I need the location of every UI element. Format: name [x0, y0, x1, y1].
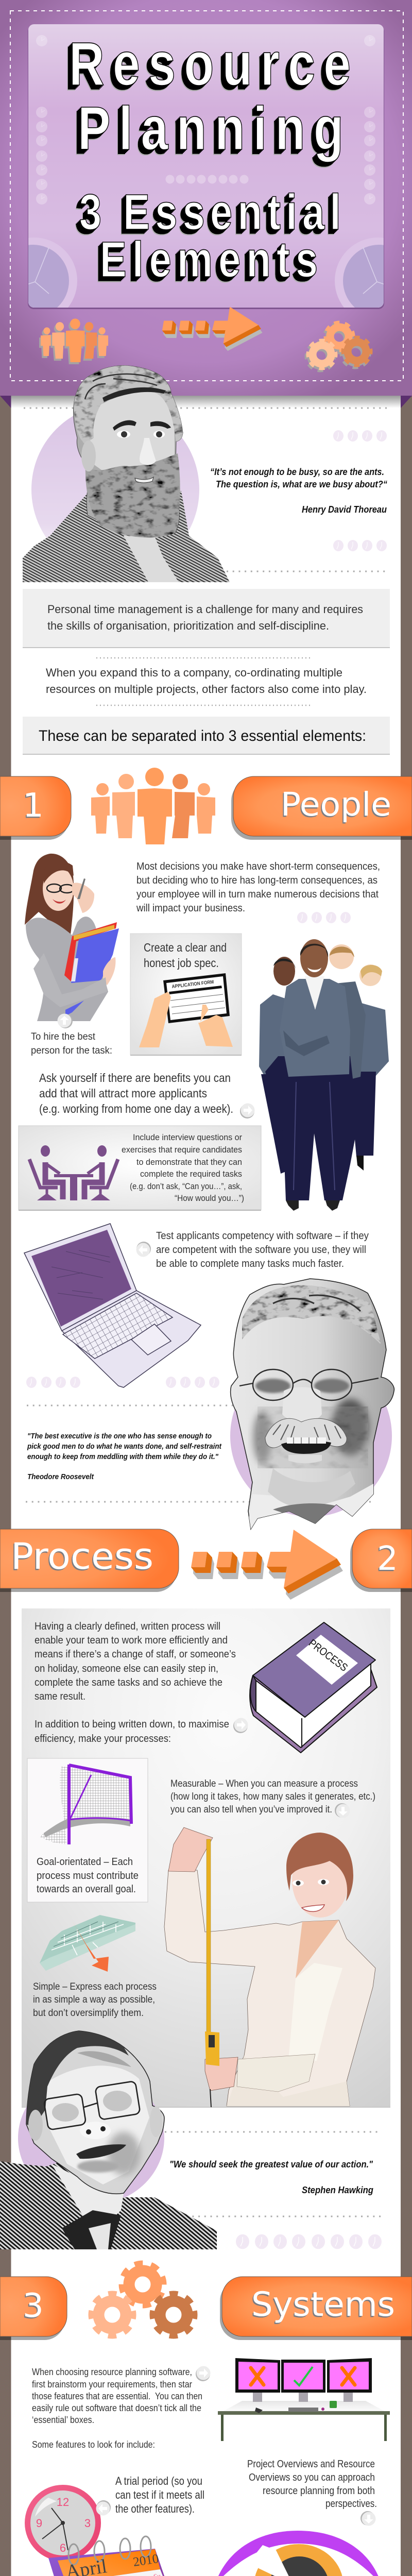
quote section: Hawking [0, 2031, 384, 2249]
text: simple: in as simple a way as possible, [33, 1994, 155, 2005]
quote text: The question is, what are we busy about?“ [216, 479, 387, 489]
circle behind Roosevelt [230, 1355, 392, 1517]
text: test applicants: be able to complete many tasks much faster. [156, 1258, 344, 1269]
text: process intro: Having a clearly defined, written process will [35, 1620, 220, 1632]
card: goal-orientated: towards an overall goal. [37, 1883, 136, 1895]
panel: process [22, 1608, 390, 2108]
number banner [0, 776, 71, 836]
title banner: People [281, 786, 391, 823]
text: process intro: complete the same tasks and so achieve the [35, 1676, 222, 1688]
icon: gears [91, 2257, 195, 2336]
text: trial period: A trial period (so you [115, 2475, 202, 2487]
text: project overviews: Project Overviews and Resource [247, 2459, 375, 2470]
section banner: Systems [0, 2257, 412, 2340]
text: choosing software: ‘essential’ boxes. [32, 2415, 94, 2425]
intro text: resources on multiple projects, other factors also come into play. [46, 683, 367, 696]
icon: maze [40, 1915, 135, 1972]
icon: wall clock [25, 2485, 101, 2561]
text: choosing software [32, 2367, 202, 2450]
section: Systems content [25, 2358, 398, 2576]
portrait: Thoreau [23, 366, 230, 582]
intro box 2 [23, 717, 390, 755]
quote text: Hawking: "We should seek the greatest value of our action." [169, 2159, 373, 2170]
icon: wall clock: 3 [84, 2517, 91, 2530]
icon: arrow [162, 307, 263, 351]
text: measurable: Measurable – When you can measure a process [170, 1778, 358, 1789]
icon: eye [215, 2531, 382, 2576]
text: benefits: add that will attract more applicants [39, 1087, 207, 1100]
portrait: Roosevelt [231, 1279, 394, 1530]
text: interview: exercises that require candidates [122, 1145, 242, 1155]
intro text [46, 666, 367, 696]
header [0, 0, 412, 396]
text: choosing software: Some features to look for include: [32, 2439, 155, 2450]
text: project overviews: Overviews so you can approach [249, 2472, 375, 2483]
quote text: Roosevelt: Theodore Roosevelt [27, 1472, 94, 1481]
intro box 1: Personal time management is a challenge for many and requires [47, 603, 363, 616]
card: job spec: honest job spec. [144, 956, 219, 970]
icon: arrow [191, 1530, 343, 1600]
title banner [222, 2277, 412, 2336]
text: interview: complete the required tasks [140, 1169, 242, 1179]
icon: wall clock: 6 [60, 2541, 66, 2554]
quote text: Hawking [169, 2159, 373, 2195]
text: process intro: enable your team to work more efficiently and [35, 1634, 228, 1646]
quote text: Hawking: Stephen Hawking [302, 2184, 373, 2195]
text: choosing software: When choosing resource planning software, [32, 2367, 192, 2377]
icon: tablet form: APPLICATION FORM [171, 979, 214, 990]
button: down [360, 2511, 376, 2526]
title banner: Process [11, 1535, 153, 1578]
title [69, 29, 351, 287]
button: down [335, 1803, 350, 1818]
title banner: Systems [251, 2285, 395, 2324]
text: measurable [170, 1778, 375, 1815]
title banner [0, 1529, 179, 1588]
button: right [196, 2366, 210, 2381]
title: Elements [100, 231, 318, 287]
text: most decisions: Most decisions you make have short-term consequences, [136, 861, 380, 872]
number banner [352, 1529, 412, 1588]
title banner [233, 776, 412, 836]
quote text: Roosevelt [27, 1432, 222, 1481]
card: goal-orientated [27, 1758, 148, 1902]
button: right [233, 1718, 248, 1733]
text: to hire [31, 1031, 112, 1056]
intro box 1: the skills of organisation, prioritization and self-discipline. [47, 619, 329, 632]
card: interview [19, 1126, 261, 1211]
icon: process book [250, 1622, 377, 1753]
text: to hire: To hire the best [31, 1031, 96, 1042]
text: measurable: (how long it takes, how many sales it generates, etc.) [170, 1791, 375, 1802]
icon: monitors on desk [218, 2358, 390, 2441]
text: most decisions: but deciding who to hire has long-term consequences, as [136, 875, 377, 886]
card: job spec [130, 934, 242, 1056]
icon: calendar [45, 2536, 176, 2576]
text: interview [122, 1132, 244, 1203]
quote text: Roosevelt: "The best executive is the one who has sense enough to [27, 1432, 212, 1440]
quote section: Thoreau [23, 366, 387, 582]
text: choosing software: those features that are essential. You can then [32, 2391, 202, 2401]
intro text: When you expand this to a company, co-ordinating multiple [46, 666, 342, 679]
photo: woman with folders [25, 854, 119, 1021]
text: measurable: you can also tell when you’ve improved it. [170, 1804, 332, 1815]
quote text: Roosevelt: enough to keep from meddling with them while they do it." [27, 1452, 219, 1461]
text: to hire: person for the task: [31, 1045, 112, 1056]
number banner [0, 2277, 67, 2336]
text: process intro: same result. [35, 1690, 85, 1702]
icon: process book: PROCESS [306, 1637, 350, 1674]
intro box 1 [23, 589, 390, 648]
text: benefits: (e.g. working from home one day a week). [39, 1102, 233, 1115]
text: trial period: the other features). [115, 2502, 195, 2515]
text: interview: to demonstrate that they can [136, 1157, 242, 1167]
section banner: People [0, 768, 412, 844]
text: simple [33, 1981, 157, 2019]
text: most decisions: will impact your business. [136, 903, 245, 914]
text: process intro: on holiday, someone else can easily step in, [35, 1663, 218, 1674]
text: simple: Simple – Express each process [33, 1981, 157, 1992]
text: process intro: In addition to being written down, to maximise [35, 1718, 229, 1730]
text: test applicants: Test applicants competency with software – if they [156, 1230, 369, 1242]
icon: people group [91, 768, 215, 844]
icon: wall clock: 12 [57, 2496, 69, 2509]
text: benefits: Ask yourself if there are benefits you can [39, 1071, 231, 1084]
quote text: “It’s not enough to be busy, so are the ants. [210, 467, 384, 477]
button: up [58, 1014, 73, 1028]
text: interview: (e.g. don’t ask, “Can you…”, ask, [130, 1181, 242, 1191]
portrait: Hawking [0, 2031, 217, 2249]
text: test applicants: are competent with the software you use, they will [156, 1244, 366, 1256]
number banner: 1 [23, 787, 44, 825]
title: 3 Essential [79, 184, 341, 240]
text: process intro: means if there’s a change of staff, or someone’s [35, 1648, 236, 1660]
quote text: Henry David Thoreau [302, 504, 387, 515]
text: most decisions: your employee will in turn make numerous decisions that [136, 889, 379, 900]
icon: wall clock: 9 [36, 2517, 42, 2530]
text: interview: Include interview questions or [133, 1132, 242, 1142]
text: interview: “How would you…”) [175, 1193, 244, 1203]
title panel [28, 24, 384, 308]
clock left [28, 238, 77, 308]
section banner: Process [0, 1529, 412, 1600]
photo: business team [259, 939, 389, 1211]
text: most decisions [136, 861, 380, 914]
text: choosing software: easily rule out software that doesn’t tick all the [32, 2403, 201, 2413]
text: simple: but don’t oversimplify them. [33, 2007, 144, 2019]
button: left [136, 1242, 151, 1257]
circle behind Hawking [18, 2071, 164, 2205]
text: project overviews: resource planning from both [263, 2485, 375, 2497]
photo: woman with tape measure [164, 1827, 375, 2107]
card: goal-orientated: Goal-orientated – Each [37, 1856, 133, 1868]
button: left [96, 2500, 111, 2515]
icon: people [41, 318, 108, 362]
clock dots [36, 35, 375, 205]
title: Planning [78, 94, 344, 162]
intro box 2: These can be separated into 3 essential elements: [39, 727, 366, 744]
section: People content [19, 854, 394, 1530]
text: test applicants [156, 1230, 369, 1269]
text: process intro: efficiency, make your processes: [35, 1733, 171, 1744]
text: process intro [35, 1620, 236, 1744]
text: project overviews: perspectives. [325, 2498, 377, 2510]
icon: tablet form [139, 973, 233, 1047]
quote text [210, 467, 387, 515]
icon: laptop [24, 1224, 201, 1387]
title: Resource [69, 29, 351, 98]
text: trial period: can test if it meets all [115, 2488, 204, 2501]
quote text: Roosevelt: pick good men to do what he wants done, and self-restraint [27, 1442, 222, 1451]
card: job spec: Create a clear and [144, 941, 227, 954]
icon: calendar: 2010 [132, 2552, 160, 2569]
clock right [335, 238, 384, 308]
text: project overviews [247, 2459, 377, 2510]
circle behind portrait [31, 404, 199, 574]
number banner: 3 [23, 2287, 44, 2325]
text: benefits [39, 1071, 233, 1115]
icon: gears [308, 318, 371, 368]
icon: interview table [29, 1145, 118, 1200]
text: choosing software: first brainstorm your requirements, then star [32, 2379, 192, 2389]
button: right [240, 1104, 254, 1118]
icon: goal net [40, 1765, 131, 1844]
number banner: 2 [377, 1540, 398, 1578]
card: goal-orientated: process must contribute [37, 1870, 139, 1882]
text: trial period [115, 2475, 204, 2515]
